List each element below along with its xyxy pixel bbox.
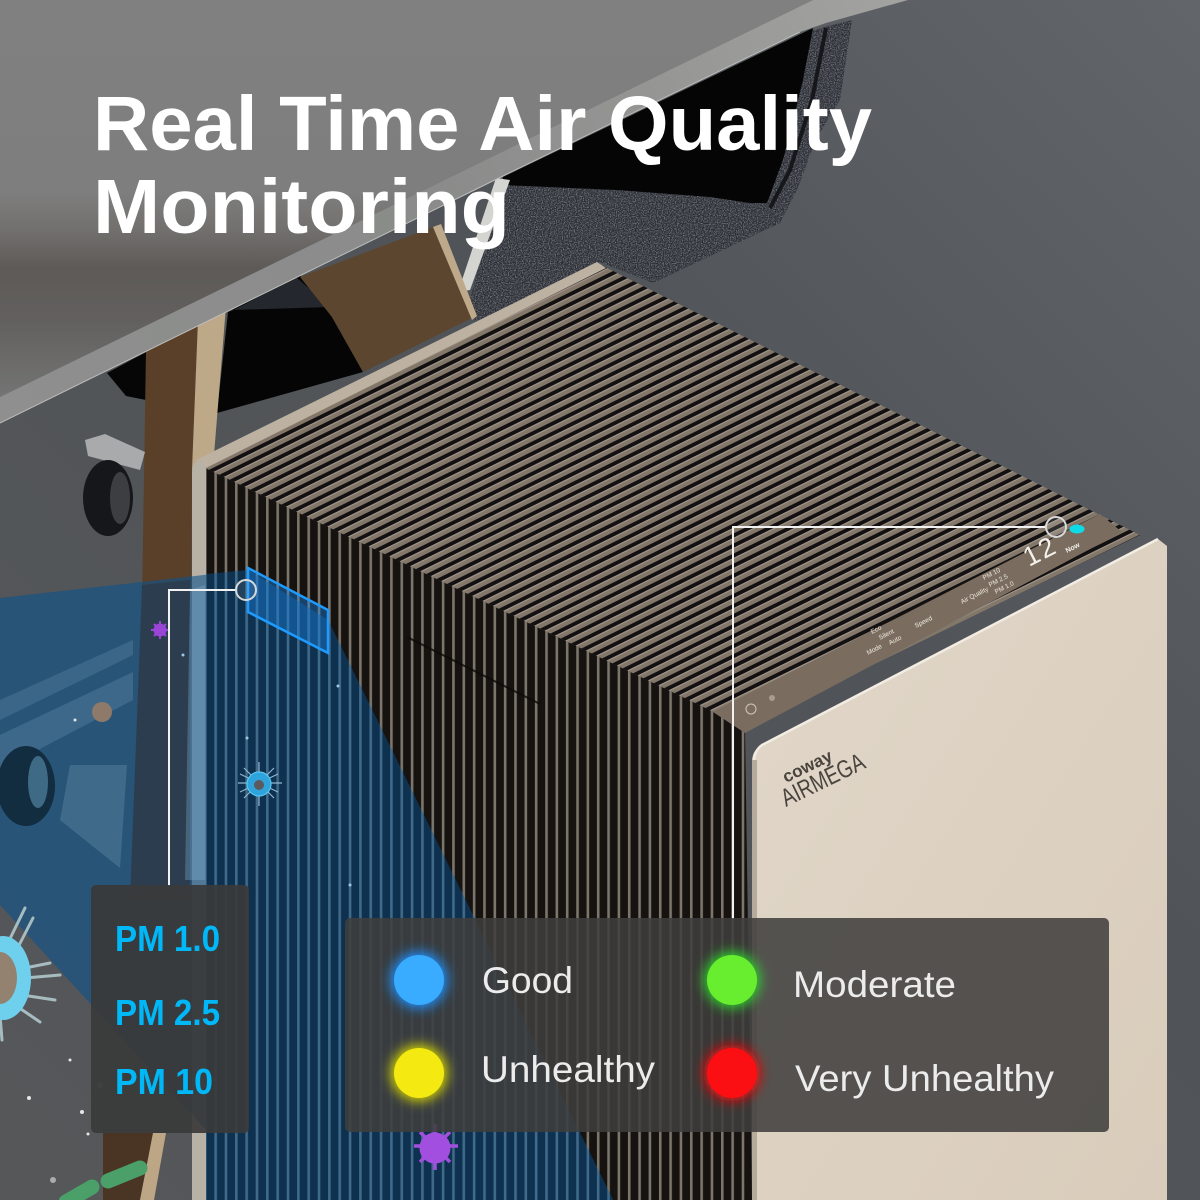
panel: particle sizes: [91, 885, 249, 1133]
label: PM 10: PM 10: [115, 1061, 213, 1102]
label: PM 1.0: PM 1.0: [115, 918, 220, 959]
control strip: PM 2.5: [988, 573, 1010, 589]
control strip: Silent: [878, 628, 896, 642]
control strip: Eco: [870, 624, 883, 636]
label: Good: Good: [482, 960, 573, 1001]
particle: large cyan virus: [0, 908, 60, 1040]
purifier back rim: [196, 262, 606, 468]
label: Very Unhealthy: Very Unhealthy: [795, 1058, 1055, 1099]
air purifier: [192, 262, 1167, 1200]
caster wheel in the beam: [0, 746, 55, 826]
sensor window: [248, 568, 328, 653]
control strip: [713, 514, 1122, 733]
indicator: blue: [391, 952, 447, 1008]
control strip: Now: [1065, 542, 1082, 555]
chair wooden shell: [103, 224, 477, 1200]
control strip: Auto: [888, 634, 903, 647]
purifier grille top: [203, 263, 1140, 727]
control strip: Speed: [914, 615, 934, 630]
indicator: yellow: [391, 1045, 447, 1101]
particle: blue virus: [238, 762, 282, 806]
control strip: PM 1.0: [994, 580, 1016, 596]
office chair behind the table: [107, 20, 852, 413]
particle: green bacteria: [66, 1168, 140, 1200]
brand logo: coway: [779, 746, 836, 787]
indicator: red: [704, 1045, 760, 1101]
label: PM 2.5: PM 2.5: [115, 992, 220, 1033]
purifier grille front: [192, 460, 752, 1200]
title: Monitoring: [93, 164, 510, 250]
control strip: PM 10: [982, 567, 1002, 582]
chair shadowed interior: [503, 28, 813, 203]
dust specks: [27, 654, 352, 1183]
panel: air quality legend: [345, 918, 1109, 1132]
title: Real Time Air Quality: [93, 81, 872, 167]
label: Unhealthy: Unhealthy: [481, 1049, 656, 1090]
control strip: Air Quality: [960, 586, 990, 606]
title: [93, 81, 872, 250]
indicator: green: [704, 952, 760, 1008]
callout: indicator line: [733, 517, 1066, 919]
control strip: 12: [1018, 530, 1062, 572]
chair caster wheel: [83, 434, 145, 536]
particle: tan dust: [92, 702, 112, 722]
particle: purple small: [151, 621, 169, 639]
table top: [0, 0, 908, 423]
control strip: Mode: [866, 643, 884, 657]
chair fabric: [468, 20, 852, 322]
label: Moderate: Moderate: [793, 964, 956, 1005]
brand logo: AIRMEGA: [776, 748, 870, 812]
cream front panel: [752, 539, 1167, 1200]
callout: filter sensor line: [169, 580, 256, 886]
particle: purple virus: [414, 1124, 458, 1170]
blue sensing beam: [0, 570, 613, 1200]
